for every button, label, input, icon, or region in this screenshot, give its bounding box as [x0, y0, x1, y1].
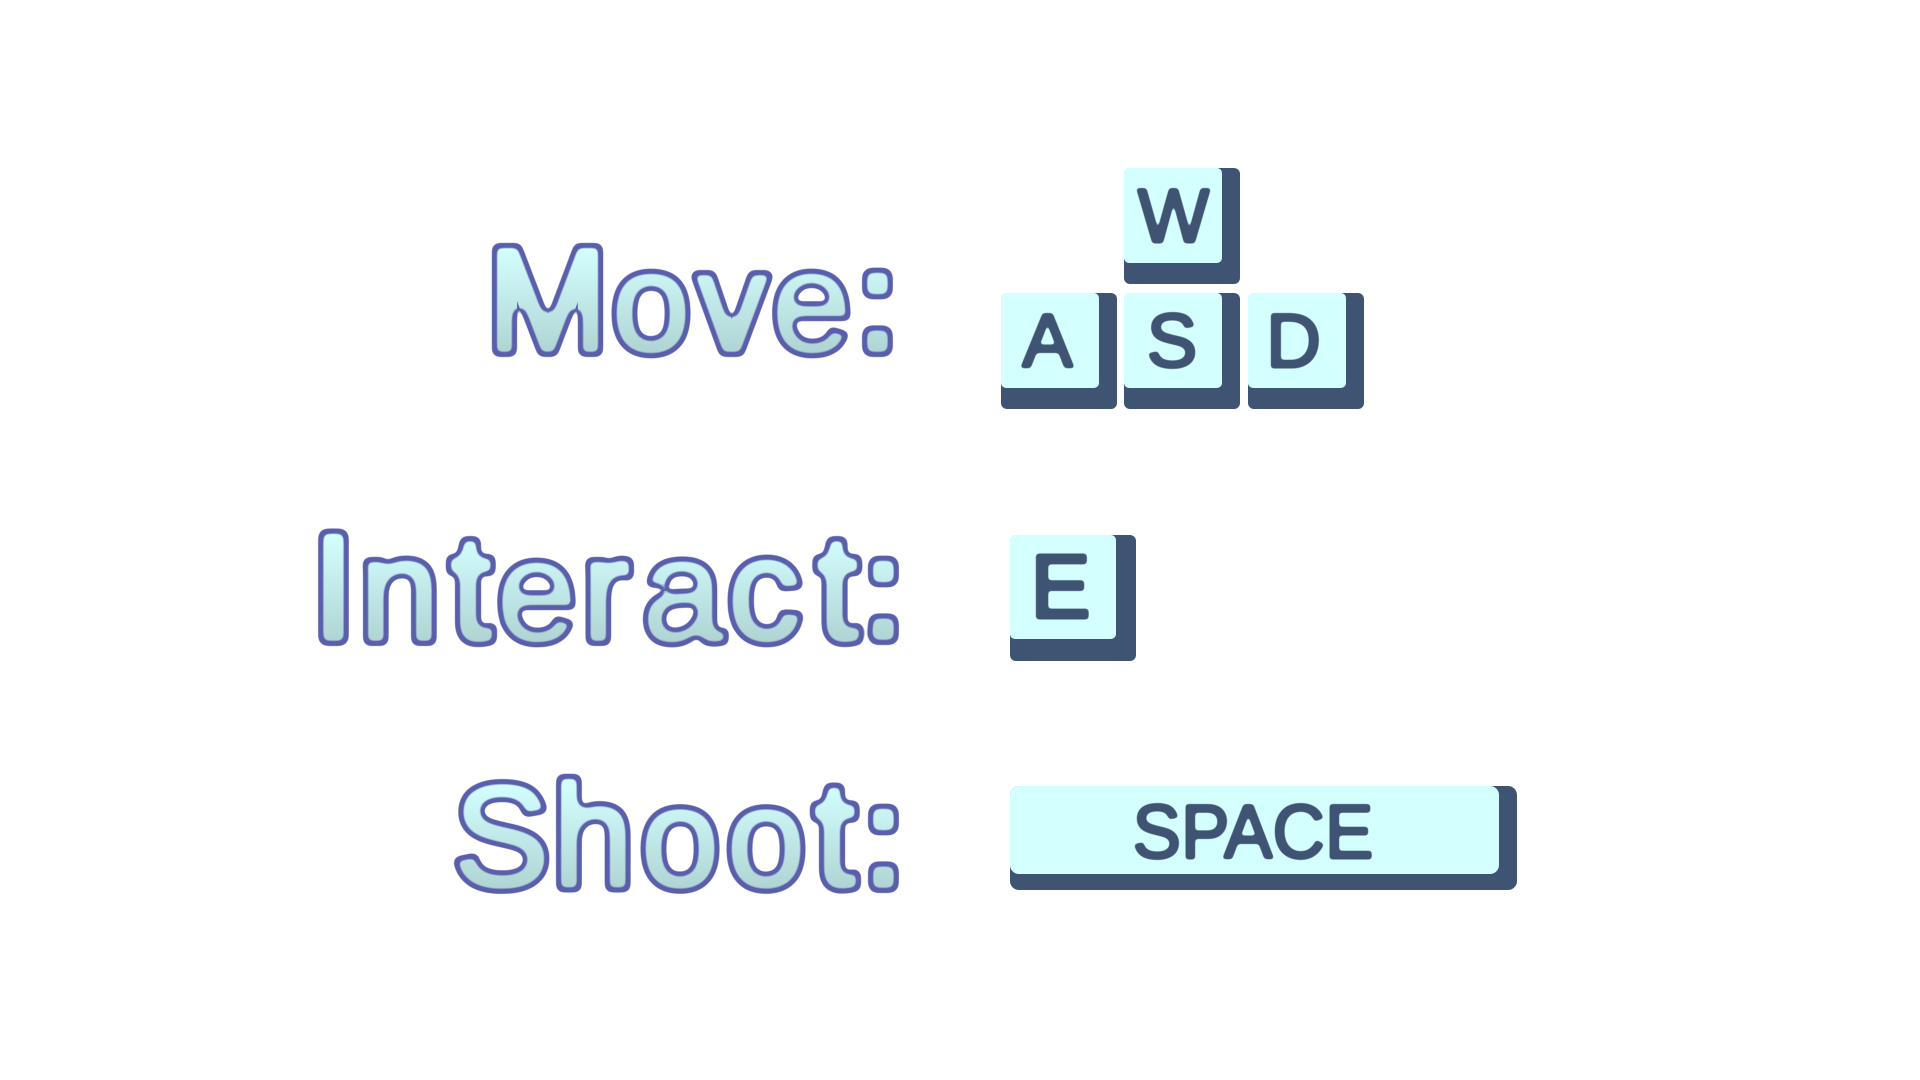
label: Shoot: :: [865, 762, 902, 913]
label: Interact: I: [313, 506, 354, 668]
label: Shoot: t: [814, 750, 856, 918]
key: S: [1124, 293, 1240, 409]
label: Move: v: [697, 224, 767, 380]
key: E: E: [1030, 538, 1091, 638]
label: Interact: [313, 504, 902, 673]
label: Interact: r: [582, 510, 630, 670]
label: Interact: e: [496, 509, 577, 672]
key: SPACE: SPACE: [1132, 790, 1374, 875]
key: W: [1124, 168, 1240, 284]
label: Interact: a: [642, 508, 724, 673]
key: E: [1010, 535, 1136, 661]
label: Move: [486, 218, 896, 383]
key: D: [1248, 293, 1364, 409]
key: D: D: [1266, 299, 1321, 384]
label: Interact: :: [865, 514, 902, 665]
label: Interact: t: [450, 504, 492, 672]
label: Interact: n: [360, 510, 440, 670]
label: Shoot: h: [552, 754, 634, 917]
label: Move: :: [859, 226, 896, 377]
key: A: A: [1022, 299, 1073, 384]
label: Interact: c: [728, 508, 801, 670]
label: Shoot: [454, 750, 902, 918]
label: Shoot: S: [454, 756, 550, 917]
label: Shoot: o: [641, 759, 719, 916]
label: Move: e: [771, 220, 852, 383]
key: SPACE: [1010, 786, 1517, 890]
label: Move: M: [486, 218, 609, 382]
key: A: [1001, 293, 1117, 409]
label: Move: o: [612, 224, 690, 380]
key: S: S: [1147, 299, 1197, 384]
label: Shoot: o: [727, 759, 805, 916]
label: Interact: t: [816, 504, 858, 672]
key: W: W: [1138, 174, 1210, 259]
